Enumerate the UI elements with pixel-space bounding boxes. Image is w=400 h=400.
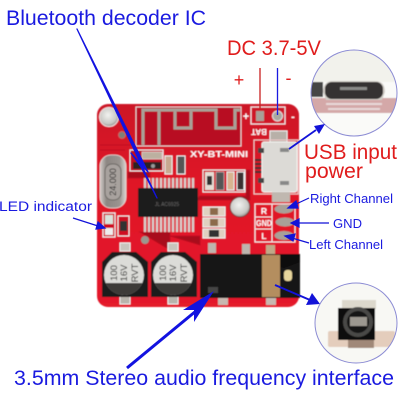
USB connector on board [254, 131, 298, 202]
arrow: USB port [289, 130, 316, 149]
capacitor right: 16V [168, 264, 179, 281]
power pads: + [243, 111, 249, 123]
large via [230, 197, 250, 217]
label: USB input power: power [305, 160, 363, 183]
via near capacitors [141, 236, 149, 244]
bluetooth IC [138, 178, 198, 232]
audio pads R GND L: R [261, 206, 267, 216]
circuit board [97, 104, 300, 307]
arrow: Right Channel [288, 198, 309, 208]
arrowhead: stereo interface [183, 291, 214, 322]
arrow: Left Channel [285, 234, 309, 243]
small SMD components near IC [130, 150, 185, 174]
capacitor right: 100 [158, 265, 169, 281]
label: plus: + [234, 70, 244, 90]
label: Right Channel: Right Channel [310, 192, 393, 206]
audio pads R GND L: L [261, 231, 267, 241]
line: negative lead [276, 68, 278, 115]
arrowhead: jack to inset [306, 293, 320, 305]
inset: micro USB connector [310, 50, 398, 136]
antenna [136, 107, 241, 146]
line: positive lead [259, 68, 261, 110]
arrow: LED indicator [73, 218, 105, 229]
arrow: GND [291, 219, 329, 227]
label: USB input power [304, 141, 397, 183]
audio jack [200, 243, 300, 305]
power pads: - [291, 111, 295, 123]
arrow: stereo interface [127, 311, 196, 368]
resistor stack [203, 207, 225, 238]
power pads: BAT [251, 127, 267, 136]
small components row [203, 170, 245, 192]
power pads [243, 107, 295, 136]
capacitor right [151, 243, 197, 304]
arrow: Bluetooth decoder IC [77, 29, 157, 198]
resistor [118, 216, 129, 236]
crystal [100, 155, 126, 208]
label: Left Channel: Left Channel [309, 238, 383, 252]
inset: audio jack [315, 283, 397, 363]
audio pads R GND L [255, 204, 295, 242]
mounting hole [100, 108, 118, 126]
dark trace regions [100, 145, 250, 250]
capacitor left: 100 [109, 265, 120, 281]
label: USB input power: USB input [304, 141, 397, 164]
capacitor right: RVT [179, 263, 190, 282]
LED indicator component [103, 213, 115, 237]
label: DC voltage: DC 3.7-5V [227, 37, 321, 60]
label: minus: - [286, 68, 292, 88]
label: LED indicator: LED indicator [0, 199, 93, 214]
silkscreen label: XY-BT-MINI [190, 149, 248, 159]
label: stereo interface: 3.5mm Stereo audio frequency interface [14, 367, 394, 390]
audio pads R GND L: GND [256, 218, 272, 228]
capacitor left: 16V [119, 264, 130, 281]
bluetooth IC: JL AC6925 [155, 202, 179, 208]
capacitor left [102, 243, 148, 304]
arrow: jack to inset [275, 285, 310, 300]
heading: Bluetooth decoder IC: Bluetooth decoder IC [6, 7, 206, 30]
via [118, 132, 126, 138]
arrowhead: USB port [314, 124, 325, 134]
capacitor left: RVT [130, 263, 141, 282]
crystal: 24.000 [108, 168, 118, 196]
label: GND: GND [333, 216, 362, 231]
